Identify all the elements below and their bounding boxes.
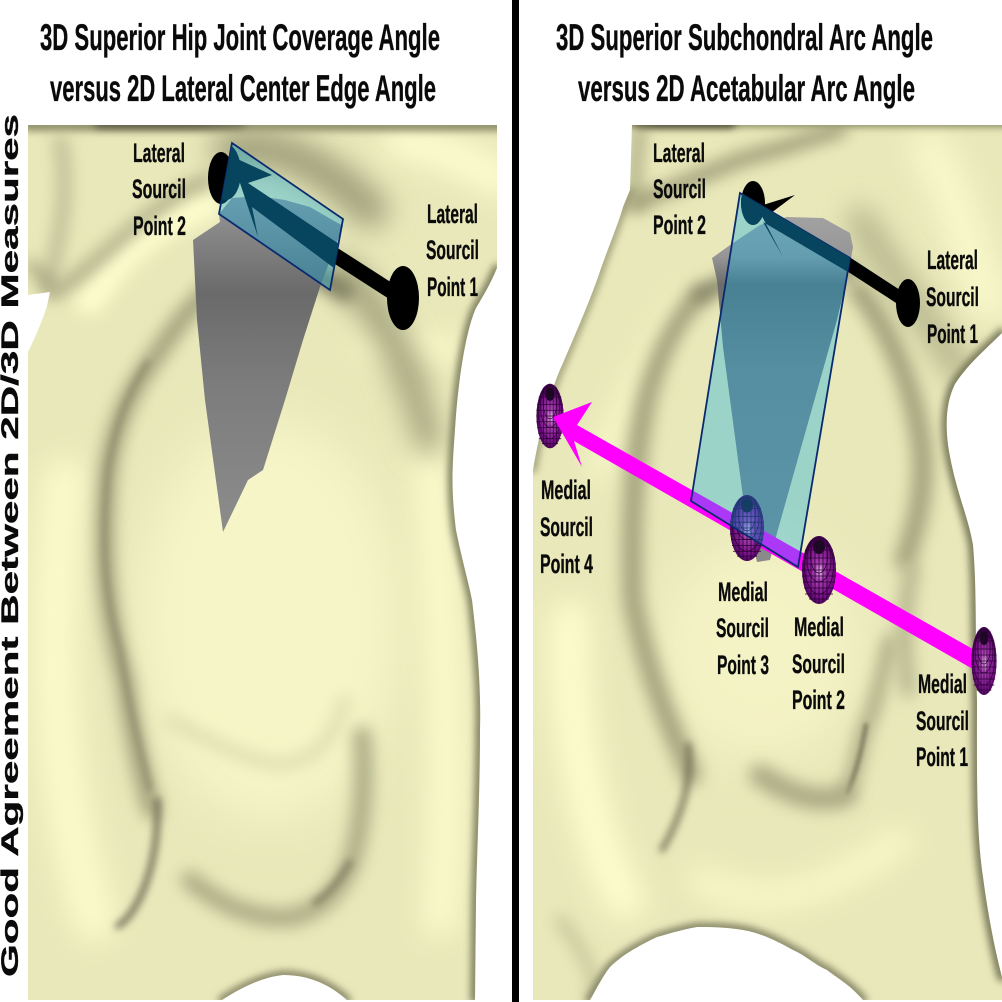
label: medial sourcil point 3 xyxy=(716,577,769,680)
arrow shaft: lateral sourcil, left xyxy=(330,252,400,297)
medial sourcil point 2 xyxy=(802,536,836,604)
label: right lateral sourcil point 2: Lateral xyxy=(653,138,705,168)
title: left panel: versus 2D Lateral Center Edge Angle xyxy=(50,68,436,109)
arrow: lateral sourcil, inside box xyxy=(222,146,338,268)
label: medial sourcil point 3: Sourcil xyxy=(716,613,769,643)
surface shading: right xyxy=(533,122,1002,1000)
magenta arrow: medial sourcil xyxy=(536,384,978,668)
label: left lateral sourcil point 1: Lateral xyxy=(427,199,478,229)
label: medial sourcil point 4 xyxy=(540,475,593,579)
label: left lateral sourcil point 2: Lateral xyxy=(133,138,185,168)
label: medial sourcil point 3: Medial xyxy=(718,577,768,607)
label: left lateral sourcil point 1: Sourcil xyxy=(426,235,479,265)
lateral sourcil point 2 xyxy=(741,181,765,225)
label: medial sourcil point 4: Point 4 xyxy=(540,549,593,579)
lateral sourcil point 2 xyxy=(208,152,234,204)
translucent angle box: left xyxy=(219,143,343,290)
label: right lateral sourcil point 2: Sourcil xyxy=(653,174,706,204)
lateral sourcil point 1 xyxy=(896,279,920,327)
bone surface: right xyxy=(533,125,1002,1000)
arrow: lateral sourcil, black part xyxy=(745,195,905,301)
medial sourcil point 3 xyxy=(730,495,764,561)
panel: right hip surface xyxy=(533,122,1002,1000)
title: left panel: 3D Superior Hip Joint Coverage Angle xyxy=(40,17,440,58)
coverage region: left gray surface xyxy=(193,196,343,532)
arrow: lateral sourcil, inside box xyxy=(741,194,850,272)
label: left lateral sourcil point 1 xyxy=(426,199,479,302)
label: medial sourcil point 1 xyxy=(916,669,969,772)
label: medial sourcil point 2: Medial xyxy=(794,612,844,642)
panel: left hip surface xyxy=(28,122,500,1000)
label: medial sourcil point 2: Point 2 xyxy=(792,685,845,715)
bone surface: left xyxy=(28,125,497,1000)
label: left lateral sourcil point 2: Sourcil xyxy=(132,174,186,204)
translucent angle box: right xyxy=(691,193,850,567)
lateral sourcil point 1 xyxy=(387,266,419,330)
label: left lateral sourcil point 2 xyxy=(132,138,186,241)
coverage region: right gray surface xyxy=(712,217,853,562)
title: left panel xyxy=(40,17,440,109)
panel divider xyxy=(512,0,519,1002)
label: right lateral sourcil point 2 xyxy=(653,138,706,240)
label: left lateral sourcil point 1: Point 1 xyxy=(427,272,478,302)
label: medial sourcil point 2: Sourcil xyxy=(792,649,845,679)
arrow shape xyxy=(553,402,978,668)
label: right lateral sourcil point 1 xyxy=(926,245,979,349)
label: left lateral sourcil point 2: Point 2 xyxy=(133,211,186,241)
label: medial sourcil point 2 xyxy=(792,612,845,715)
label: right lateral sourcil point 2: Point 2 xyxy=(653,210,706,240)
label: medial sourcil point 1: Medial xyxy=(918,669,967,699)
label: medial sourcil point 4: Medial xyxy=(541,475,591,505)
surface shading: left xyxy=(28,122,500,1000)
medial sourcil point 4 xyxy=(536,384,564,448)
medial sourcil point 1 xyxy=(971,627,997,695)
label: medial sourcil point 4: Sourcil xyxy=(540,512,593,542)
label: medial sourcil point 3: Point 3 xyxy=(717,650,769,680)
title: right panel xyxy=(556,17,933,109)
